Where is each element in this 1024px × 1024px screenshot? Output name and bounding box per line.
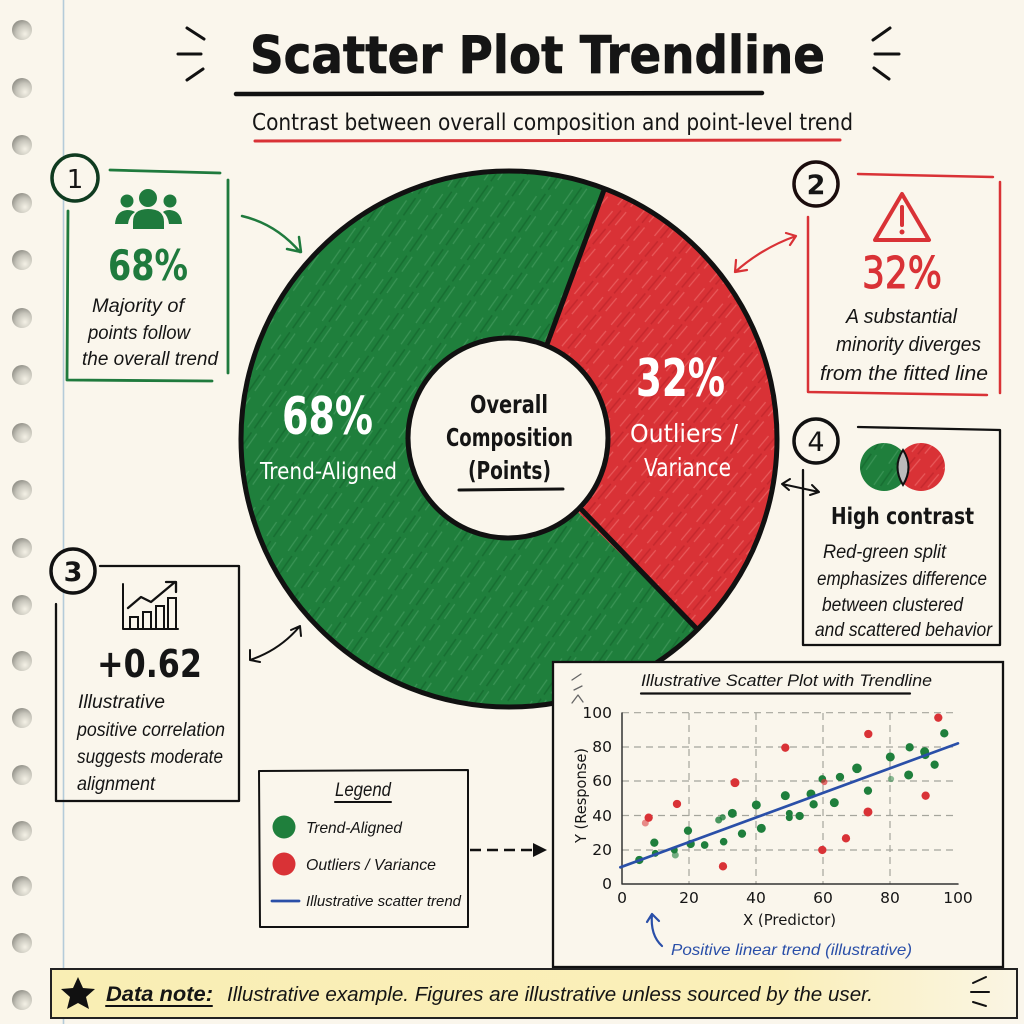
- note text: Illustrative example. Figures are illustrative unless sourced by the user.: [227, 984, 873, 1006]
- red label: [630, 349, 739, 482]
- panel 1: trend aligned share: [52, 155, 228, 381]
- icon: rising bars: [123, 582, 178, 629]
- description: suggests moderate: [77, 747, 223, 768]
- description: points follow: [87, 323, 191, 344]
- grid lines: [622, 713, 958, 884]
- legend item: trend line: Illustrative scatter trend: [306, 893, 462, 910]
- legend heading: Legend: [335, 780, 392, 801]
- y tick labels: 0: [602, 875, 612, 893]
- x axis title: X (Predictor): [743, 911, 836, 929]
- badge 1: [52, 155, 98, 201]
- green segment: [241, 170, 697, 706]
- legend item: trend-aligned: Trend-Aligned: [306, 820, 403, 837]
- x tick labels: 20: [679, 889, 699, 907]
- donut chart: [241, 170, 777, 707]
- panel 2: outlier share: [794, 162, 1000, 395]
- scatter points and trend line: [620, 714, 958, 870]
- x tick labels: 100: [943, 889, 973, 907]
- annotation: positive linear trend: [647, 914, 912, 959]
- description: A substantial: [845, 306, 958, 328]
- description: minority diverges: [836, 334, 981, 356]
- centre label: (Points): [468, 456, 551, 485]
- margin line: [62, 0, 64, 1024]
- description: and scattered behavior: [815, 620, 993, 641]
- description: [820, 306, 988, 385]
- icon: overlapping circles: [860, 443, 945, 491]
- arrow: panel 3 to donut: [250, 626, 301, 662]
- x tick labels: 80: [880, 889, 900, 907]
- heading: High contrast: [831, 504, 974, 530]
- red label: 32%: [636, 349, 725, 409]
- centre label: Overall: [470, 390, 548, 419]
- red segment: [544, 188, 777, 629]
- y tick labels: 80: [592, 738, 612, 756]
- data note banner: [51, 969, 1017, 1018]
- badge 3: [51, 549, 95, 593]
- red points: [642, 714, 942, 870]
- chart title: Illustrative Scatter Plot with Trendline: [641, 671, 932, 690]
- panel: scatter plot: [553, 662, 1003, 967]
- description: [815, 542, 993, 641]
- stat 68%: 68%: [108, 241, 188, 290]
- description: emphasizes difference: [817, 569, 987, 590]
- legend: [259, 770, 468, 927]
- green label: Trend-Aligned: [259, 459, 397, 485]
- icon: people: [115, 189, 182, 229]
- description: Red-green split: [823, 542, 947, 563]
- badge 1: 1: [67, 165, 83, 195]
- badge 2: 2: [807, 170, 825, 201]
- y tick labels: 20: [592, 841, 612, 859]
- icon: star: [61, 977, 95, 1009]
- green label: 68%: [282, 387, 373, 447]
- legend item: outliers: Outliers / Variance: [306, 857, 436, 874]
- x tick labels: 0: [617, 889, 627, 907]
- arrow: panel 1 to donut: [242, 216, 301, 252]
- description: Illustrative: [78, 692, 165, 713]
- y tick labels: 100: [582, 704, 612, 722]
- y tick labels: 40: [592, 807, 612, 825]
- red label: Variance: [644, 453, 731, 482]
- centre label: [446, 390, 573, 490]
- description: the overall trend: [82, 349, 219, 370]
- title: Scatter Plot Trendline: [250, 26, 825, 86]
- axes: [622, 713, 958, 884]
- description: Majority of: [92, 296, 186, 317]
- description: from the fitted line: [820, 363, 988, 385]
- arrow: legend to scatter plot: [470, 843, 547, 857]
- icon: warning triangle: [875, 194, 929, 240]
- description: [82, 296, 219, 370]
- description: [76, 692, 225, 795]
- description: alignment: [77, 774, 156, 795]
- small scribble icon: [572, 674, 583, 703]
- x tick labels: [617, 889, 973, 907]
- legend item: trend-aligned: [272, 816, 403, 838]
- panel 3: correlation: [51, 549, 239, 801]
- arrow: panel 2 to donut: [735, 233, 796, 272]
- badge 2: [794, 162, 838, 206]
- panel 4: high contrast: [794, 419, 1000, 645]
- y axis title: Y (Response): [572, 748, 590, 844]
- y tick labels: 60: [592, 772, 612, 790]
- description: between clustered: [822, 595, 964, 616]
- centre label: Composition: [446, 423, 573, 452]
- y tick labels: [582, 704, 612, 893]
- stat +0.62: +0.62: [97, 642, 202, 686]
- badge 4: [794, 419, 838, 463]
- annotation: positive linear trend: Positive linear trend (illustrative): [671, 942, 912, 959]
- trend line: [620, 743, 958, 867]
- arrow: panel 4 to donut: [782, 479, 819, 495]
- green points: [636, 730, 948, 864]
- x tick labels: 60: [813, 889, 833, 907]
- stat 32%: 32%: [862, 248, 942, 299]
- red label: Outliers /: [630, 419, 739, 448]
- badge 3: 3: [64, 557, 82, 588]
- subtitle: Contrast between overall composition and point-level trend: [252, 110, 853, 136]
- note text: Data note:: [106, 983, 213, 1006]
- x tick labels: 40: [746, 889, 766, 907]
- badge 4: 4: [807, 427, 825, 458]
- binder holes: [12, 20, 32, 1010]
- legend item: outliers: [272, 852, 436, 876]
- description: positive correlation: [76, 720, 225, 741]
- green label: [259, 387, 397, 485]
